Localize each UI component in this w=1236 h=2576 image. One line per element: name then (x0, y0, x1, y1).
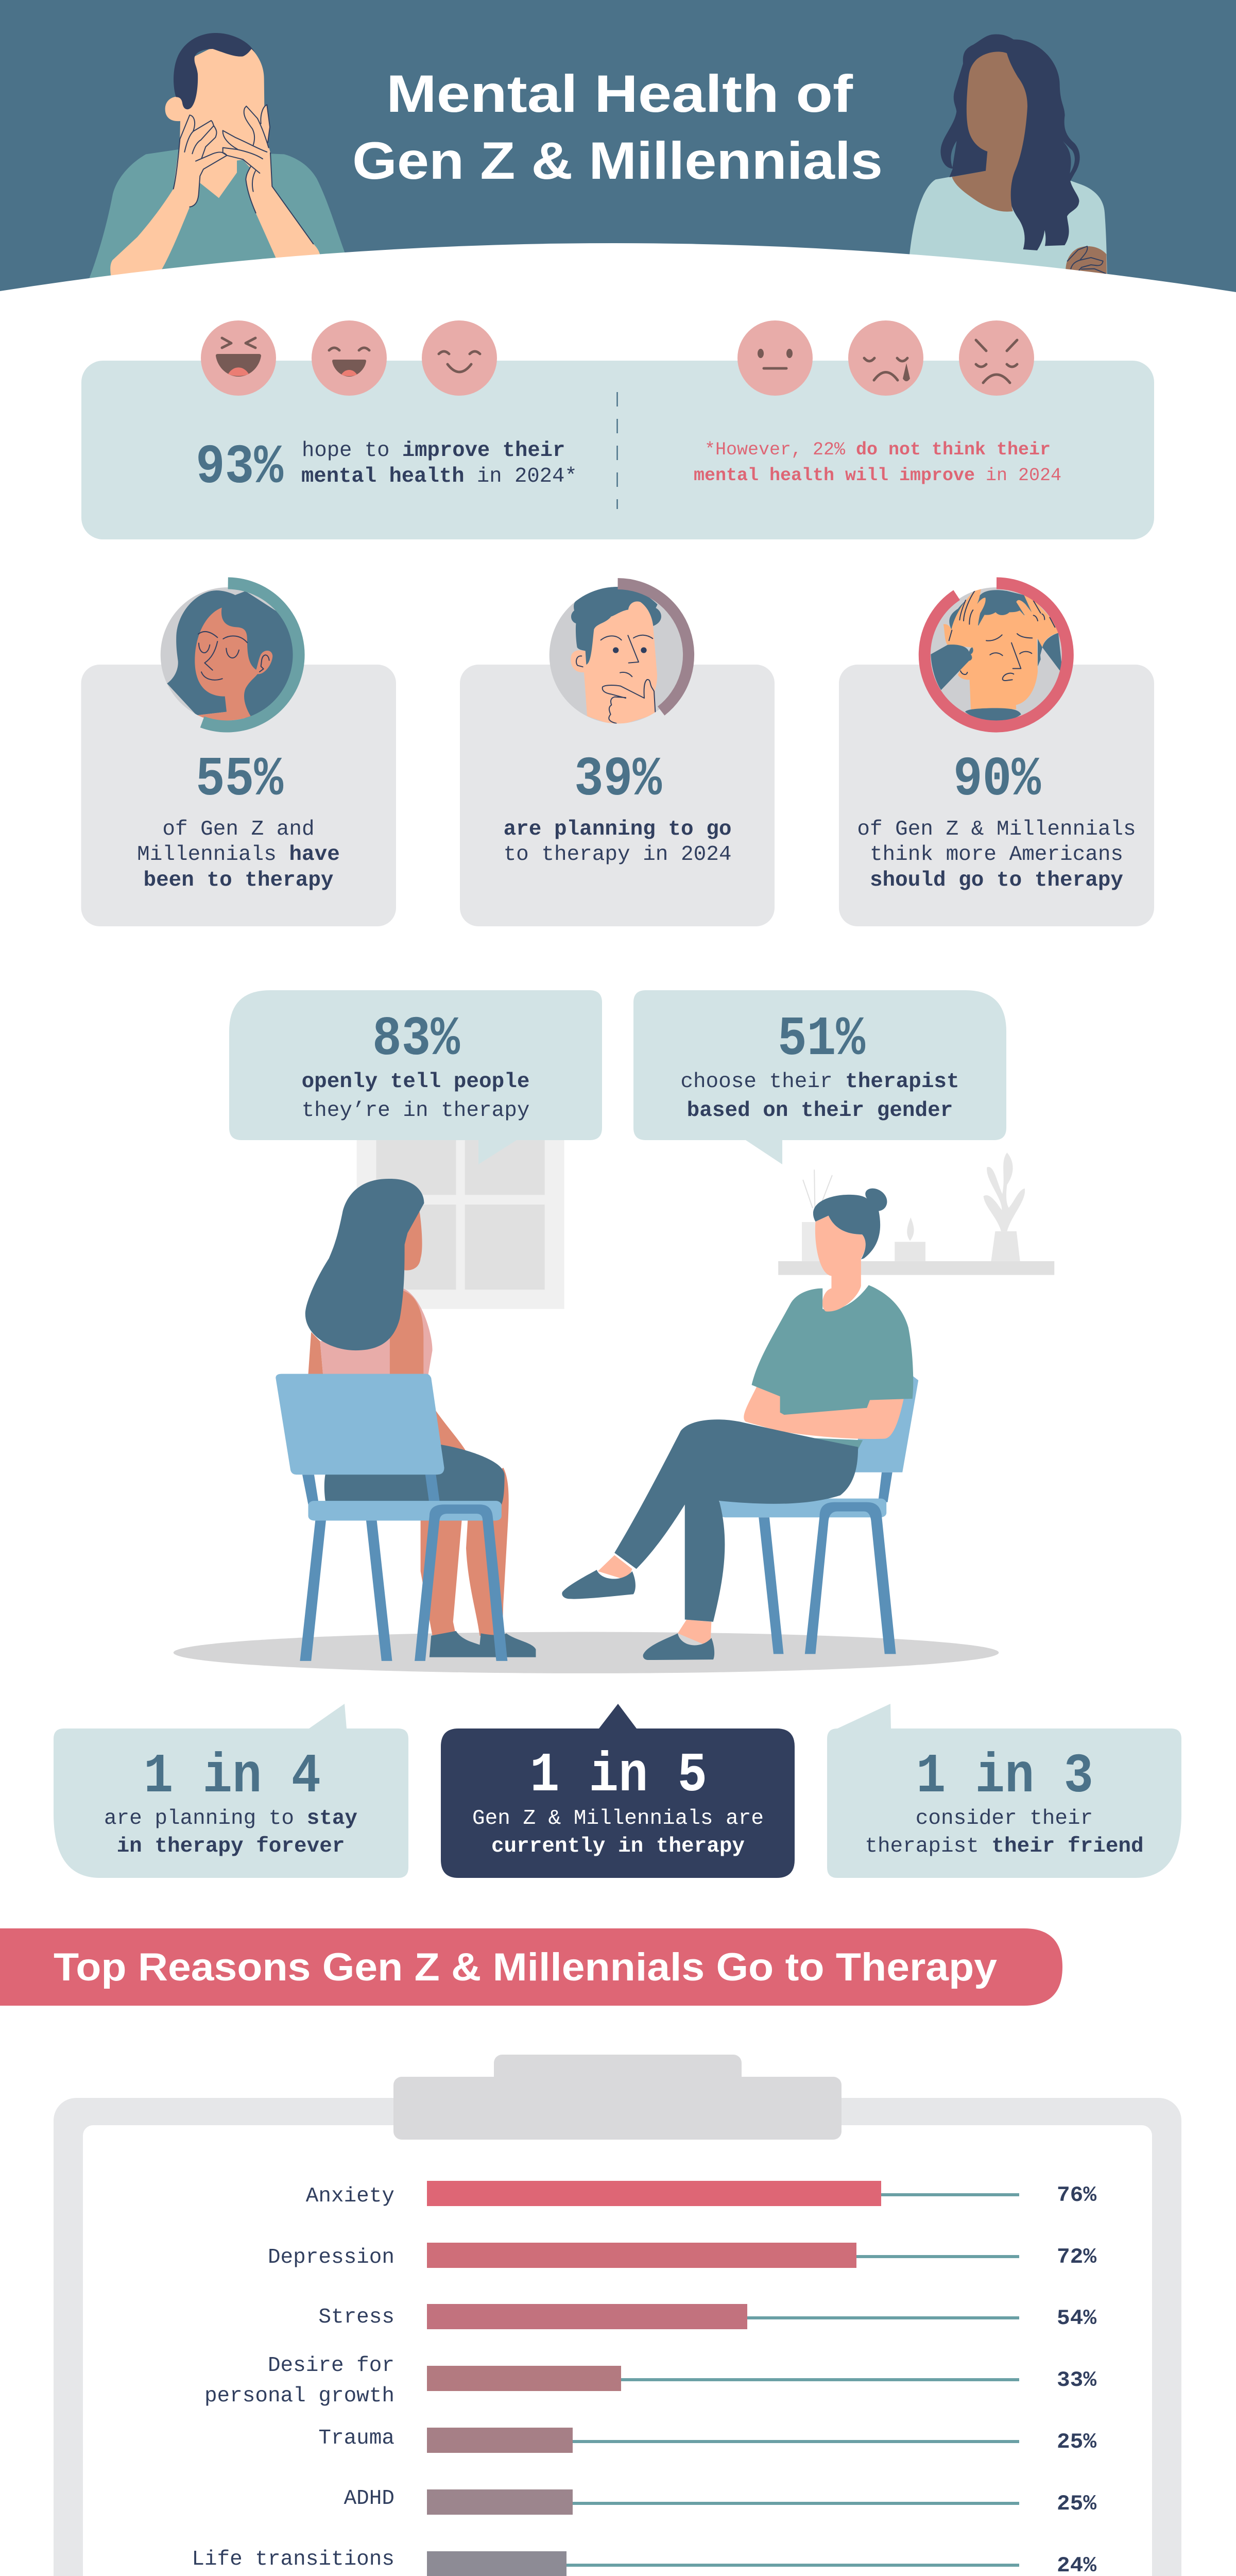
row: Depression: Depression (268, 2246, 394, 2269)
text: more should go (857, 818, 1136, 892)
row: Stress: 54% (1057, 2307, 1096, 2331)
speech bubble: 83% (229, 990, 602, 1164)
row: Life transitions: Life transitions (192, 2548, 394, 2571)
left chair (276, 1374, 507, 1661)
callout: 1 in 3: therapist their friend (865, 1835, 1144, 1858)
row: Life transitions (192, 2548, 1096, 2576)
callout: 1 in 4: in therapy forever (117, 1835, 345, 1858)
text: their friend: consider their (916, 1807, 1093, 1831)
row: Desire for personal growth (204, 2354, 1096, 2408)
stat: 93%: 93% (196, 436, 283, 499)
stat: 83%: 83% (372, 1008, 460, 1071)
row: Desire for personal growth: 33% (1057, 2368, 1096, 2393)
panel: 39% planning therapy (460, 584, 775, 926)
row: Desire for personal growth: personal growth (204, 2384, 394, 2408)
white curve (0, 243, 1236, 330)
row: Trauma: 25% (1057, 2430, 1096, 2454)
row: Depression (268, 2243, 1096, 2269)
callout: 1 in 3 (827, 1704, 1181, 1878)
stat: 51%: 51% (778, 1008, 865, 1071)
text: based on gender: based on their gender (687, 1099, 953, 1123)
text: will improve: mental health will improve in 2024 (694, 465, 1061, 486)
row: Stress (318, 2304, 1096, 2331)
panel: 55% been to therapy (81, 583, 396, 926)
callout: 1 in 4 (54, 1704, 408, 1878)
text: openly tell people: openly tell people (302, 1070, 529, 1094)
row: ADHD: 25% (1057, 2492, 1096, 2516)
bar chart: top reasons (128, 2181, 1096, 2576)
text: more should go: should go to therapy (870, 869, 1123, 892)
woman seated from behind (305, 1179, 536, 1657)
illustration: man covering mouth (89, 33, 349, 299)
divider (616, 392, 618, 509)
section heading banner: Top Reasons Gen Z & Millennials Go to Therapy (54, 1945, 997, 1989)
shelf with decor (778, 1153, 1054, 1275)
illustration: woman with long hair (909, 35, 1107, 289)
stat: 90%: 90% (953, 749, 1041, 811)
therapist figure (562, 1189, 913, 1660)
row: Trauma (318, 2427, 1096, 2454)
text: been to therapy: of Gen Z and (162, 818, 315, 841)
stat: 1 in 3: 1 in 3 (916, 1745, 1093, 1808)
text: hope to improve: hope to improve their (302, 439, 565, 463)
text: in therapy: they’re in therapy (302, 1099, 529, 1123)
row: ADHD: ADHD (344, 2487, 394, 2511)
panel: 90% more should go (839, 583, 1154, 926)
text: stay in therapy: are planning to stay (104, 1807, 357, 1831)
row: Anxiety: 76% (1057, 2183, 1096, 2208)
text: planning (504, 818, 731, 867)
row: Trauma: Trauma (318, 2427, 394, 2450)
clipboard clip (393, 2055, 842, 2140)
section heading banner (0, 1928, 1062, 2006)
row: Depression: 72% (1057, 2245, 1096, 2269)
title: Mental Health of (386, 64, 853, 123)
row: Anxiety (306, 2181, 1096, 2208)
row: ADHD (344, 2487, 1096, 2516)
text: however 22%: *However, 22% do not think their (705, 439, 1051, 460)
ring: 55 percent (202, 583, 299, 726)
header banner (0, 0, 1236, 330)
icon: smiling face (422, 320, 497, 396)
right chair (719, 1376, 918, 1654)
window (357, 1140, 564, 1309)
row: Anxiety: Anxiety (306, 2184, 394, 2208)
text: been to therapy: been to therapy (143, 869, 334, 892)
icon: laughing face (201, 320, 276, 396)
illustration: stressed man (931, 589, 1062, 721)
title (352, 64, 883, 190)
text: mental health in 2024: mental health in 2024* (301, 465, 577, 488)
row: Stress: Stress (318, 2306, 394, 2329)
icon: angry face (959, 320, 1034, 396)
text: more should go: of Gen Z & Millennials (857, 818, 1136, 841)
row: Desire for personal growth: Desire for (268, 2354, 394, 2378)
icon: crying face (848, 320, 923, 396)
illustration: woman with eyes closed (167, 590, 295, 721)
text: more should go: think more Americans (870, 843, 1123, 867)
ring: 90 percent (924, 583, 1068, 726)
speech bubble: 51% (633, 990, 1006, 1164)
ring: 39 percent (618, 584, 689, 711)
title: Gen Z & Millennials (352, 131, 883, 190)
floor shadow (174, 1632, 999, 1673)
stat: 1 in 4: 1 in 4 (144, 1745, 321, 1808)
stat: 39%: 39% (574, 749, 662, 811)
callout: 1 in 5 (441, 1704, 795, 1878)
text: been to therapy (137, 818, 340, 892)
icon: grinning face (312, 320, 387, 396)
icon: neutral face (737, 320, 813, 396)
illustration: therapy session (174, 1140, 1054, 1673)
text: been to therapy: Millennials have (137, 843, 340, 867)
text: planning: to therapy in 2024 (504, 843, 731, 867)
illustration: man thinking (571, 587, 661, 726)
stat: 1 in 5: 1 in 5 (530, 1744, 707, 1807)
text: currently in therapy: Gen Z & Millennials are (472, 1807, 764, 1831)
text: planning: are planning to go (504, 818, 731, 841)
callout: 1 in 5: currently in therapy (491, 1835, 745, 1858)
stat: 55%: 55% (196, 749, 283, 811)
panel: 2024 outlook (81, 320, 1154, 539)
text: choose therapist: choose their therapist (680, 1070, 959, 1094)
panel: clipboard (54, 2055, 1181, 2576)
